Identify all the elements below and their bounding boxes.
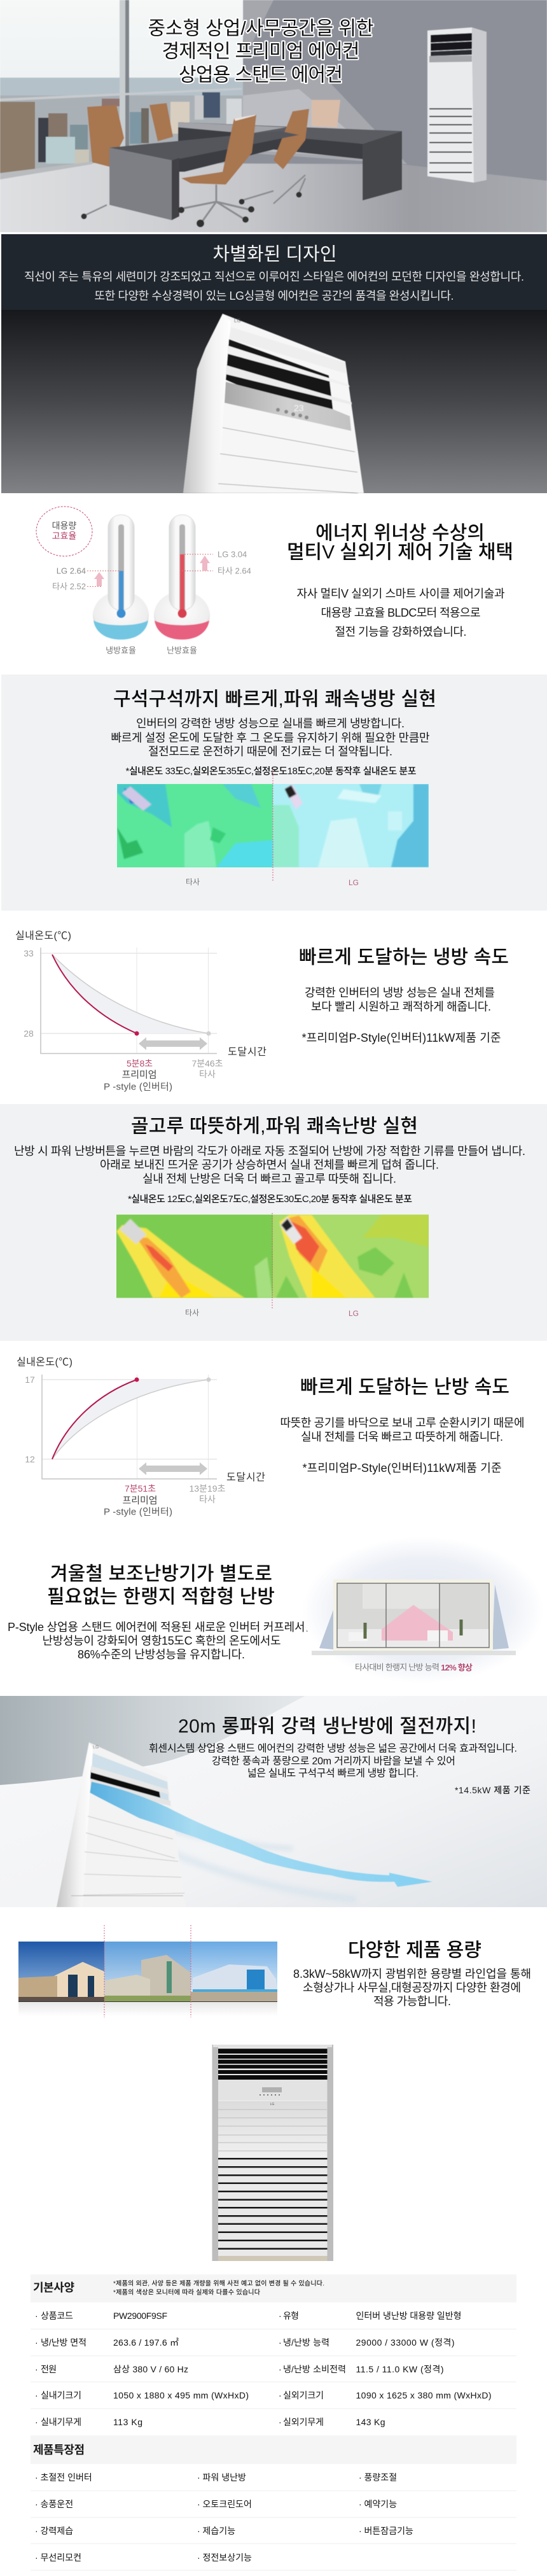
heading: 20m 롱파워 강력 냉난방에 절전까지!: [178, 1716, 476, 1737]
description: 난방성능이 강화되어 영항15도C 혹한의 온도에서도: [42, 1635, 281, 1648]
description: 실내 전체 난방은 더욱 더 빠르고 골고루 따뜻해 집니다.: [142, 1173, 396, 1186]
right building: [193, 1964, 276, 1991]
thermometer readouts: 냉방효율: [106, 645, 136, 655]
chart labels: 도달시간: [228, 1046, 267, 1058]
row: code and type: PW2900F9SF: [113, 2311, 167, 2321]
panel: cold climate heating: [8, 1537, 544, 1683]
row: area and capacity: 29000 / 33000 W (정격): [356, 2337, 454, 2348]
divider: [272, 770, 274, 881]
chart labels: P -style (인버터): [104, 1082, 172, 1092]
feature row 2: · 예약기능: [359, 2499, 397, 2509]
description: [305, 986, 495, 1013]
feature row 3: · 버튼잠금기능: [359, 2526, 413, 2536]
row: power: 냉/난방 소비전력: [283, 2364, 346, 2374]
row: area and capacity: ·: [35, 2337, 38, 2348]
description: 자사 멀티V 실외기 스마트 사이클 제어기술과: [296, 587, 505, 600]
hero title: 경제적인 프리미엄 에어컨: [162, 41, 360, 62]
row: size: 1050 x 1880 x 495 mm (WxHxD): [113, 2390, 249, 2400]
chart labels: 타사: [199, 1069, 216, 1079]
chart labels: 7분51초: [125, 1483, 156, 1494]
section title: 제품특장점: [33, 2444, 85, 2456]
description: 넓은 실내도 구석구석 빠르게 냉방 합니다.: [247, 1768, 419, 1779]
middle building: [141, 1955, 191, 1996]
panel: fast heating: [0, 1104, 547, 1341]
chart labels: 13분19초: [190, 1483, 226, 1494]
description: 절전 기능을 강화하였습니다.: [335, 626, 467, 638]
base: [218, 2256, 327, 2261]
row: weight: [35, 2417, 385, 2427]
thermometer readouts: 난방효율: [167, 645, 197, 655]
LG logo: LG: [93, 1745, 99, 1750]
description: 대용량 고효율 BLDC모터 적용으로: [321, 606, 481, 619]
ceiling: [0, 1696, 305, 1785]
heatmap labels: LG: [349, 878, 359, 887]
illustration: room in winter: [302, 1537, 544, 1683]
line chart: heating speed: [17, 1357, 265, 1517]
panel: 20m long power: [0, 1696, 547, 1907]
feature row 1: [35, 2472, 397, 2482]
row: code and type: 상품코드: [41, 2311, 73, 2321]
line chart: cooling speed: [15, 930, 267, 1092]
feature row 1: · 초절전 인버터: [35, 2472, 92, 2482]
heatmap labels: [186, 878, 359, 887]
hero photo: [0, 0, 547, 232]
feature row 2: [35, 2499, 397, 2509]
heading: 다양한 제품 용량: [348, 1940, 481, 1961]
caption: 타사대비 한랭지 난방 능력 12% 향상: [355, 1662, 473, 1672]
louvers: [218, 2101, 327, 2157]
row: size: [35, 2390, 491, 2400]
description: 강력한 인버터의 냉방 성능은 실내 전체를: [305, 986, 495, 999]
row: size: ·: [279, 2390, 282, 2400]
heading: 빠르게 도달하는 냉방 속도: [299, 947, 509, 968]
description: 아래로 보내진 뜨거운 공기가 상승하면서 실내 전체를 빠르게 덥혀 줍니다.: [100, 1159, 439, 1172]
notice: *제품의 외관, 사양 등은 제품 개량을 위해 사전 예고 없이 변경 될 수 있습니다.: [113, 2279, 324, 2287]
heading: [47, 1564, 275, 1607]
description: 휘센시스템 상업용 스탠드 에어컨의 강력한 냉방 성능은 넓은 공간에서 더욱 효과적입니다.: [149, 1742, 517, 1754]
LG logo: LG: [234, 318, 241, 323]
description: 따뜻한 공기를 바닥으로 보내 고루 순환시키기 때문에: [280, 1417, 524, 1429]
description: [24, 270, 524, 302]
row: area and capacity: 263.6 / 197.6 ㎡: [113, 2337, 179, 2348]
footnote: *실내온도 12도C,실외온도7도C,설정온도30도C,20분 동작후 실내온도 분포: [128, 1194, 412, 1205]
snowy trees: [319, 1610, 333, 1649]
chart labels: 5분8초: [127, 1058, 153, 1068]
motion streaks: [176, 1831, 355, 1901]
vents: [218, 2048, 327, 2080]
pink warm air: [382, 1605, 453, 1641]
product photo: stand air conditioner: [212, 2045, 333, 2261]
description: [293, 1968, 531, 2008]
arrow: cold airflow: [90, 1782, 433, 1887]
footnote: *프리미엄P-Style(인버터)11kW제품 기준: [303, 1462, 501, 1474]
table: product features: [31, 2435, 516, 2570]
feature row 1: · 파워 냉난방: [197, 2472, 246, 2482]
description: 86%수준의 난방성능을 유지합니다.: [78, 1648, 245, 1661]
badge: high efficiency: 대용량: [52, 521, 76, 531]
control panel: [218, 2080, 327, 2100]
chart labels: P -style (인버터): [104, 1507, 172, 1517]
row: weight: 실내기무게: [41, 2417, 81, 2427]
description: [149, 1742, 517, 1779]
row: weight: ·: [279, 2417, 282, 2427]
chart labels: [24, 948, 267, 1092]
row: size: 실외기크기: [283, 2390, 324, 2400]
row: power: ·: [279, 2364, 282, 2374]
description: [8, 1621, 315, 1661]
chart labels: 12: [25, 1454, 35, 1464]
table: basic specifications: [31, 2274, 516, 2427]
heading: 멀티V 실외기 제어 기술 채택: [287, 542, 513, 563]
notice: [113, 2279, 324, 2296]
text block: cooling speed: [299, 947, 509, 1044]
feature row 1: · 풍량조절: [359, 2472, 397, 2482]
heading: 빠르게 도달하는 난방 속도: [300, 1377, 509, 1397]
thermometer readouts: LG 2.64: [57, 566, 86, 575]
thermometer readouts: 타사 2.52: [52, 582, 86, 591]
description: 인버터의 강력한 냉방 성능으로 실내를 빠르게 냉방합니다.: [136, 717, 405, 730]
text block: heating speed: [280, 1377, 524, 1474]
description: 소형상가나 사무실,대형공장까지 다양한 환경에: [303, 1982, 521, 1994]
feature row 2: · 오토크린도어: [197, 2499, 252, 2509]
description: 적용 가능합니다.: [373, 1995, 451, 2008]
description: 강력한 풍속과 풍량으로 20m 거리까지 바람을 보낼 수 있어: [212, 1755, 455, 1767]
row: power: 11.5 / 11.0 KW (정격): [356, 2364, 444, 2374]
badge: high efficiency: [36, 507, 92, 556]
feature row 3: [35, 2526, 413, 2536]
row: power: ·: [35, 2364, 38, 2374]
chart labels: 프리미엄: [122, 1495, 158, 1506]
row: size: 1090 x 1625 x 380 mm (WxHxD): [356, 2390, 491, 2400]
description: 또한 다양한 수상경력이 있는 LG싱글형 에어컨은 공간의 품격을 완성시킵니다.: [94, 290, 454, 302]
icon: air conditioner close-up: [183, 314, 364, 493]
row: code and type: ·: [35, 2311, 38, 2321]
feature row 3: · 강력제습: [35, 2526, 73, 2536]
hero title: 상업용 스탠드 에어컨: [179, 65, 343, 85]
heatmap labels: 타사: [185, 1308, 199, 1317]
badge: high efficiency: 고효율: [52, 531, 76, 541]
description: 실내 전체를 더욱 빠르고 따뜻하게 해줍니다.: [301, 1431, 503, 1443]
panel: various capacities: [18, 1925, 531, 2017]
heatmap labels: [185, 1308, 359, 1318]
feature row 2: · 송풍운전: [35, 2499, 73, 2509]
heading: 필요없는 한랭지 적합형 난방: [47, 1586, 275, 1607]
description: 보다 빨리 시원하고 쾌적하게 해줍니다.: [311, 1000, 491, 1013]
hero title: [148, 18, 374, 85]
feature row 3: · 제습기능: [197, 2526, 235, 2536]
feature row 4: · 무선리모컨: [35, 2552, 81, 2563]
heading: [287, 523, 513, 563]
row: area and capacity: 냉/난방 면적: [41, 2337, 87, 2348]
feature row 4: · 정전보상기능: [197, 2552, 252, 2563]
thermometer readouts: LG 3.04: [218, 550, 247, 559]
icon: air conditioner unit: [57, 1742, 186, 1907]
row: size: ·: [35, 2390, 38, 2400]
row: power: 삼상 380 V / 60 Hz: [113, 2364, 188, 2374]
heading: 차별화된 디자인: [212, 244, 337, 265]
description: 직선이 주는 특유의 세련미가 강조되었고 직선으로 이루어진 스타일은 에어컨의 모던한 디자인을 완성합니다.: [24, 270, 524, 283]
section title: 기본사양: [33, 2281, 74, 2294]
divider: [272, 1213, 273, 1308]
heatmap: heating comparison: [116, 1215, 429, 1298]
icon: stand air conditioner in hero: [427, 27, 487, 183]
row: code and type: ·: [279, 2311, 282, 2321]
heading: 에너지 위너상 수상의: [315, 523, 485, 543]
description: [111, 717, 430, 758]
axis title: 실내온도(℃): [15, 930, 71, 942]
chart labels: 33: [24, 948, 34, 958]
chart labels: 도달시간: [226, 1471, 265, 1483]
heatmap labels: 타사: [186, 878, 200, 886]
thermometer readouts: 타사 2.64: [218, 566, 251, 575]
icon: cooling thermometer: [93, 515, 149, 640]
row: weight: 113 Kg: [113, 2417, 142, 2427]
hero title: 중소형 상업/사무공간을 위한: [148, 18, 374, 39]
row: weight: ·: [35, 2417, 38, 2427]
louvers: LG: [270, 2103, 274, 2106]
chart labels: 28: [24, 1028, 34, 1039]
footnote: *프리미엄P-Style(인버터)11kW제품 기준: [301, 1032, 501, 1044]
arrow: time gap: [139, 1037, 207, 1050]
photo strip: buildings: [18, 1925, 277, 2017]
heading: 골고루 따뜻하게,파워 쾌속난방 실현: [131, 1116, 418, 1137]
chart labels: 17: [25, 1375, 35, 1385]
icon: heating thermometer: [154, 515, 210, 640]
row: weight: 143 Kg: [356, 2417, 385, 2427]
axis title: 실내온도(℃): [17, 1357, 73, 1368]
row: power: 전원: [41, 2364, 57, 2374]
description: 8.3kW~58kW까지 광범위한 용량별 라인업을 통해: [293, 1968, 531, 1980]
row: code and type: 유형: [283, 2311, 299, 2321]
heatmap labels: LG: [349, 1309, 359, 1318]
description: [280, 1417, 524, 1443]
reflection: [18, 2002, 277, 2016]
row: weight: 실외기무게: [283, 2417, 324, 2427]
chart labels: 타사: [199, 1494, 216, 1504]
thermometer readouts: [52, 550, 251, 655]
row: area and capacity: 냉/난방 능력: [283, 2337, 329, 2348]
row: area and capacity: ·: [279, 2337, 282, 2348]
heading: 구석구석까지 빠르게,파워 쾌속냉방 실현: [113, 689, 436, 710]
left building: [54, 1962, 104, 1997]
row: size: 실내기크기: [41, 2390, 81, 2400]
heatmap: cooling comparison: [117, 784, 429, 867]
description: [14, 1145, 525, 1186]
notice: *제품의 색상은 모니터에 따라 실제와 다를수 있습니다: [113, 2288, 260, 2296]
chart labels: [25, 1375, 265, 1517]
display readout: 23: [294, 403, 304, 413]
panel: fast cooling: [1, 675, 547, 911]
description: 빠르게 설정 온도에 도달한 후 그 온도를 유지하기 위해 필요한 만큼만: [111, 732, 430, 745]
description: 난방 시 파워 난방버튼을 누르면 바람의 각도가 아래로 자동 조절되어 난방에 가장 적합한 기류를 만들어 냅니다.: [14, 1145, 525, 1158]
panel: energy winner technology: [36, 507, 513, 655]
panel: differentiated design: [1, 234, 547, 493]
row: code and type: [35, 2311, 462, 2321]
description: [296, 587, 505, 638]
row: area and capacity: [35, 2337, 454, 2348]
arrow: time gap: [139, 1462, 207, 1475]
chart labels: 프리미엄: [122, 1069, 156, 1081]
description: 절전모드로 운전하기 때문에 전기료는 더 절약됩니다.: [148, 745, 392, 758]
row: power: [35, 2364, 444, 2374]
heading: 겨울철 보조난방기가 별도로: [50, 1564, 272, 1585]
air outlet slots: [218, 2158, 327, 2250]
description: P-Style 상업용 스탠드 에어컨에 적용된 새로운 인버터 커프레서는: [8, 1621, 315, 1634]
footnote: *실내온도 33도C,실외온도35도C,설정온도18도C,20분 동작후 실내온도 분포: [126, 766, 417, 776]
footnote: *14.5kW 제품 기준: [455, 1785, 530, 1795]
hero panel: office with stand air conditioner: [0, 0, 547, 232]
feature row 4: [35, 2552, 252, 2563]
chart labels: 7분46초: [192, 1058, 223, 1068]
row: code and type: 인터버 냉난방 대용량 일반형: [356, 2311, 462, 2321]
furniture: [349, 1632, 368, 1641]
